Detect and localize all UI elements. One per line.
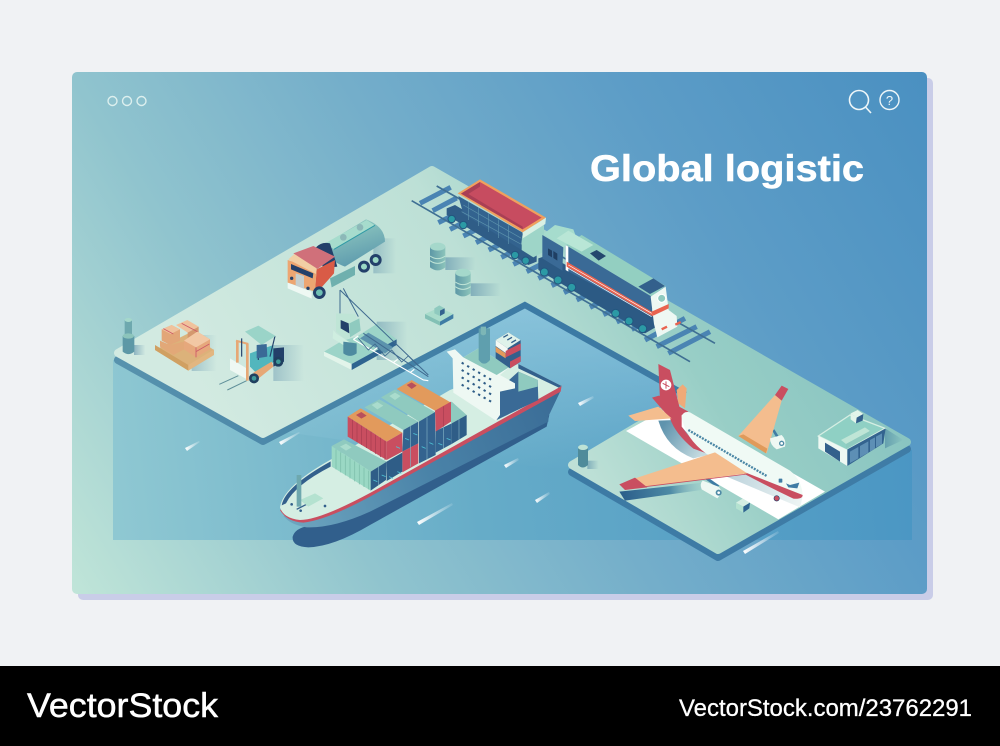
locomotive bbox=[538, 225, 681, 337]
container ship bbox=[280, 327, 562, 547]
card panel bbox=[72, 72, 927, 594]
runway bbox=[626, 405, 825, 519]
far wing bbox=[738, 386, 788, 453]
dock crane bbox=[324, 288, 428, 381]
near wing bbox=[619, 452, 747, 498]
airplane on runway bbox=[578, 364, 903, 519]
railway track bbox=[412, 186, 715, 362]
left dock objects bbox=[123, 219, 428, 390]
upper teal container bbox=[381, 389, 436, 463]
card shadow bbox=[78, 78, 933, 600]
window dots bbox=[108, 96, 146, 106]
footer bar bbox=[0, 666, 1000, 746]
tail fin bbox=[628, 364, 708, 454]
icon: help bbox=[880, 90, 899, 110]
forklift bbox=[219, 326, 304, 390]
freight wagon bbox=[447, 179, 546, 265]
ground box bbox=[736, 499, 750, 513]
dock platform bbox=[118, 170, 907, 557]
front green container bbox=[332, 439, 387, 491]
oil barrels bbox=[430, 243, 501, 296]
stacked cargo boxes bbox=[155, 320, 217, 371]
hangar building bbox=[818, 410, 903, 466]
water streaks bbox=[185, 396, 779, 554]
superstructure bbox=[447, 327, 538, 421]
ship deck bbox=[280, 364, 562, 520]
top orange container bbox=[397, 380, 451, 432]
ship hull bbox=[283, 391, 561, 527]
bollard bbox=[578, 445, 599, 469]
back containers bbox=[436, 402, 467, 453]
icon: search bbox=[850, 90, 871, 113]
title: Global logistic bbox=[590, 148, 864, 189]
train and tracks bbox=[412, 179, 715, 362]
plane shadows bbox=[619, 420, 803, 507]
red hull stripe bbox=[280, 385, 562, 523]
bollard bbox=[123, 318, 145, 355]
container stack bbox=[332, 380, 467, 491]
front red container bbox=[348, 408, 402, 481]
ship shadow bbox=[293, 415, 549, 547]
middle teal container bbox=[364, 399, 418, 472]
landing gear bbox=[774, 496, 779, 501]
water surface bbox=[113, 295, 912, 540]
icon: help: ? bbox=[886, 93, 893, 108]
fuselage bbox=[682, 412, 803, 499]
tanker truck bbox=[288, 219, 396, 299]
footer logo: VectorStock bbox=[27, 687, 219, 725]
footer url: VectorStock.com/23762291 bbox=[679, 695, 972, 722]
small crate bbox=[425, 305, 453, 326]
